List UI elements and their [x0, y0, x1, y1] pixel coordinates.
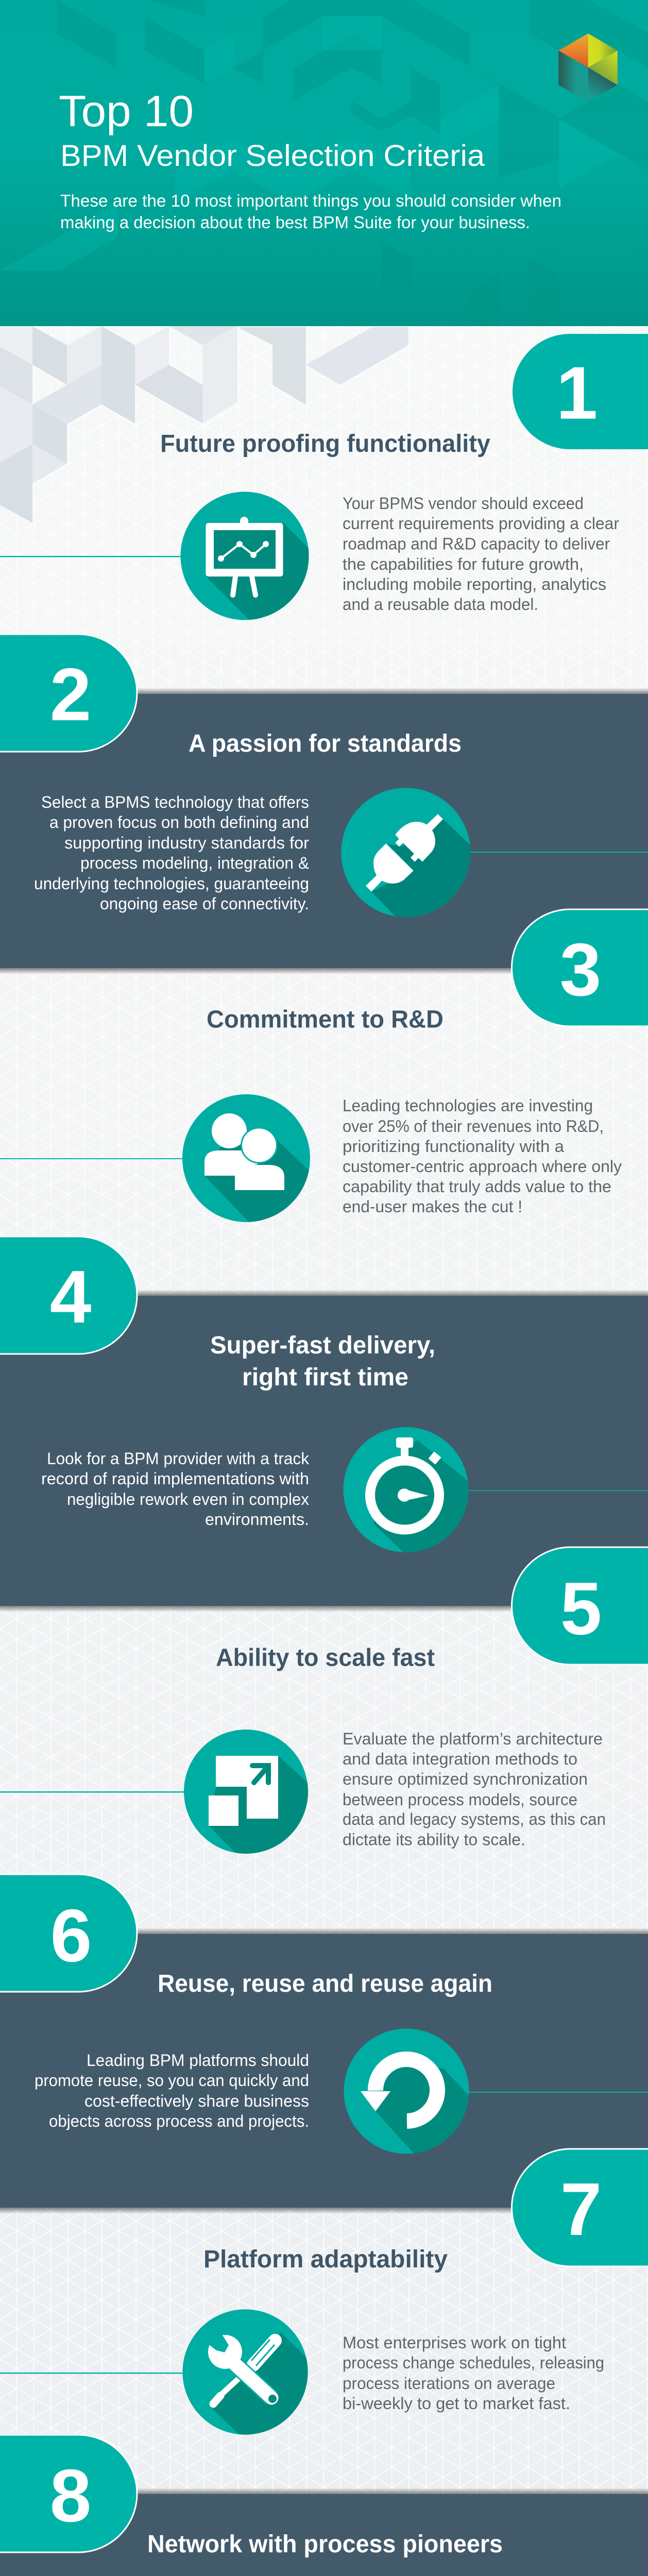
number badge 5: 5 [560, 1567, 602, 1650]
heading: A passion for standards [189, 730, 462, 757]
body text: capability that truly adds value to the [343, 1177, 611, 1196]
body text: ensure optimized synchronization [343, 1770, 588, 1788]
header banner [0, 0, 648, 326]
connector line [0, 556, 181, 557]
panel: criterion 4 [0, 1236, 648, 1606]
body text: promote reuse, so you can quickly and [35, 2071, 309, 2090]
number badge 5 [512, 1547, 648, 1665]
connector line [468, 2092, 648, 2093]
title: Top 10 [59, 87, 194, 136]
body text: process change schedules, releasing [343, 2353, 604, 2372]
body text [41, 1449, 310, 1529]
icon: plug [341, 788, 474, 921]
body text: Look for a BPM provider with a track [47, 1449, 310, 1468]
body text: negligible rework even in complex [67, 1490, 309, 1509]
heading: Commitment to R&D [207, 1006, 444, 1033]
number badge 1 [513, 334, 648, 449]
number badge 8 [0, 2435, 137, 2552]
panel: criterion 7 [0, 2149, 648, 2494]
number badge 6: 6 [50, 1894, 92, 1977]
body text: bi-weekly to get to market fast. [343, 2394, 570, 2413]
connector line [468, 1490, 648, 1491]
body text: customer-centric approach where only [343, 1157, 622, 1176]
number badge 6 [0, 1874, 137, 1992]
panel: criterion 1 [0, 326, 648, 694]
body text: over 25% of their revenues into R&D, [343, 1117, 604, 1136]
body text: Your BPMS vendor should exceed [343, 494, 584, 513]
connector line [470, 852, 648, 853]
panel: criterion 2 [0, 634, 648, 968]
icon: reuse arrow [344, 2029, 469, 2154]
logo: bizagi hexagon [558, 33, 618, 101]
heading: Ability to scale fast [216, 1645, 435, 1671]
body text: Most enterprises work on tight [343, 2333, 566, 2352]
number badge 2: 2 [50, 653, 91, 736]
body text: end-user makes the cut ! [343, 1197, 522, 1216]
body text: data and legacy systems, as this can [343, 1810, 606, 1828]
panel: criterion 5 [0, 1547, 648, 1934]
body text: supporting industry standards for [64, 834, 309, 852]
body text: Leading technologies are investing [343, 1096, 593, 1115]
body text: process modeling, integration & [80, 854, 309, 872]
connector line [0, 2372, 183, 2374]
connector line [0, 1791, 184, 1793]
body text: the capabilities for future growth, [343, 555, 584, 573]
intro text: making a decision about the best BPM Suite for your business. [60, 213, 530, 232]
heading: Future proofing functionality [160, 430, 490, 457]
panel: criterion 8 [0, 2435, 648, 2576]
intro text: These are the 10 most important things you should consider when [60, 191, 561, 210]
body text [343, 2333, 604, 2413]
heading: Reuse, reuse and reuse again [158, 1970, 492, 1997]
body text: cost-effectively share business [84, 2092, 309, 2110]
body text: Leading BPM platforms should [87, 2051, 309, 2070]
number badge 7: 7 [560, 2167, 602, 2251]
icon: people [182, 1094, 310, 1222]
heading [210, 1332, 435, 1391]
heading: Network with process pioneers [147, 2531, 503, 2558]
body text: prioritizing functionality with a [343, 1137, 564, 1156]
heading: Super-fast delivery, [210, 1332, 435, 1359]
icon: scale arrow [184, 1730, 308, 1854]
number badge 1: 1 [556, 351, 598, 435]
body text: Select a BPMS technology that offers [41, 793, 309, 811]
body text: environments. [205, 1510, 309, 1529]
body text: ongoing ease of connectivity. [100, 894, 309, 913]
body text: objects across process and projects. [49, 2112, 309, 2130]
body text: roadmap and R&D capacity to deliver [343, 535, 610, 553]
number badge 3 [512, 909, 648, 1026]
connector line [0, 1158, 183, 1159]
panel: criterion 3 [0, 909, 648, 1296]
number badge 8: 8 [50, 2454, 91, 2537]
body text: current requirements providing a clear [343, 514, 619, 533]
icon: presentation board [180, 492, 309, 620]
body text: a proven focus on both defining and [49, 813, 309, 832]
heading: Platform adaptability [203, 2246, 448, 2273]
body text: underlying technologies, guaranteeing [34, 874, 309, 893]
body text [34, 793, 309, 913]
number badge 3: 3 [560, 928, 601, 1011]
number badge 4 [0, 1236, 137, 1354]
title: BPM Vendor Selection Criteria [60, 139, 485, 173]
intro text [60, 191, 561, 232]
body text: between process models, source [343, 1790, 577, 1809]
body text: dictate its ability to scale. [343, 1830, 525, 1849]
body text: and data integration methods to [343, 1750, 577, 1768]
body text [343, 1730, 606, 1849]
number badge 2 [0, 634, 137, 752]
body text: Evaluate the platform’s architecture [343, 1730, 603, 1748]
body text: process iterations on average [343, 2374, 555, 2393]
number badge 4: 4 [50, 1255, 91, 1338]
title [59, 87, 485, 173]
panel: criterion 6 [0, 1874, 648, 2208]
body text [343, 1096, 622, 1216]
number badge 7 [512, 2149, 648, 2266]
heading: right first time [242, 1364, 408, 1391]
body text: record of rapid implementations with [41, 1469, 309, 1488]
body text: and a reusable data model. [343, 595, 538, 614]
body text: including mobile reporting, analytics [343, 575, 606, 594]
icon: stopwatch [343, 1427, 469, 1552]
body text [343, 494, 619, 614]
body text [35, 2051, 309, 2130]
icon: tools [182, 2309, 308, 2435]
